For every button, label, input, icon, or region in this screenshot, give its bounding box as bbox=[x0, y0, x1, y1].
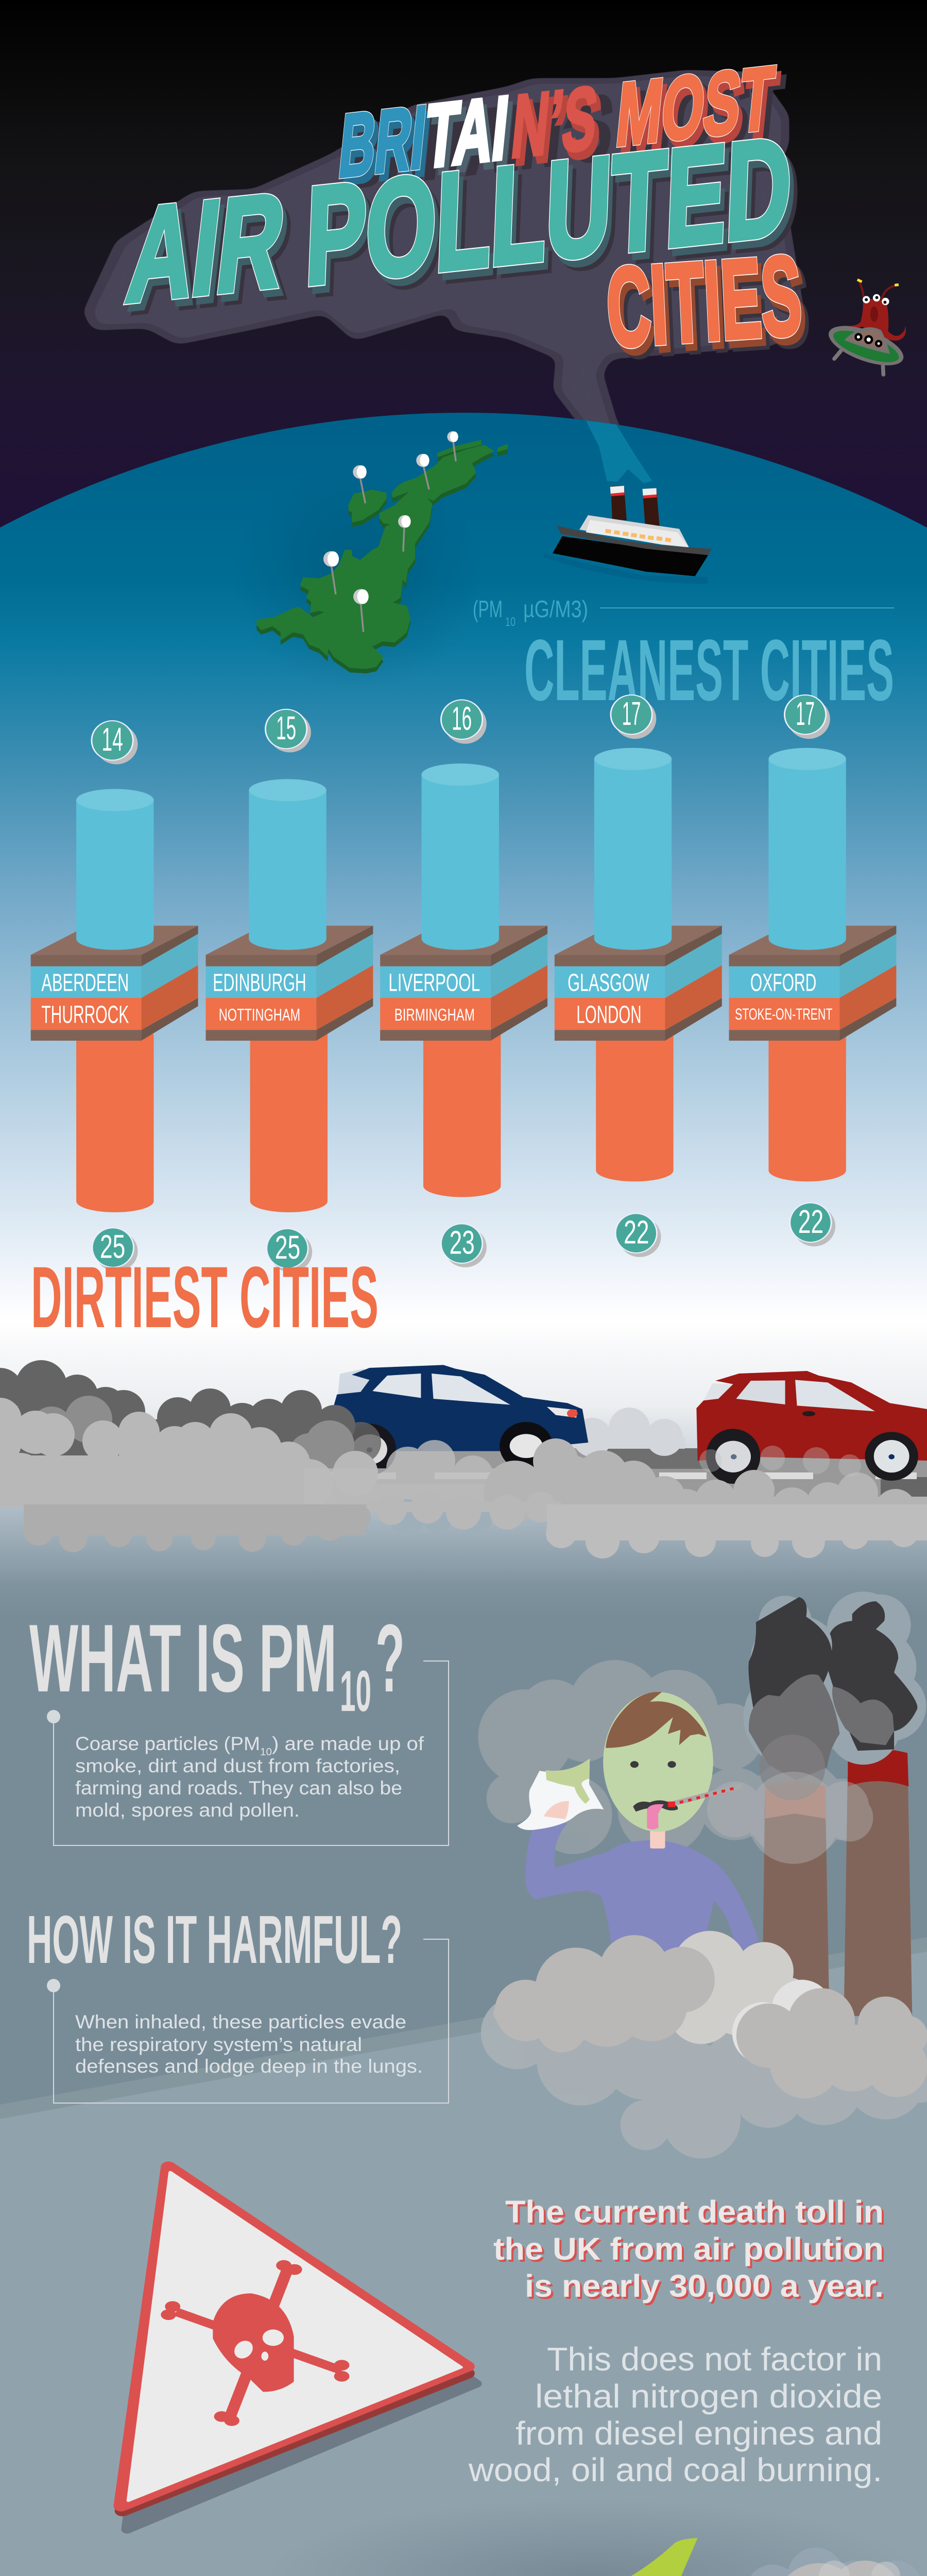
text box: how is it harmful bbox=[47, 1939, 449, 2103]
text box: how is it harmful: the respiratory system’s natural bbox=[75, 2034, 362, 2055]
text box: what is PM10: farming and roads. They can also be bbox=[75, 1777, 402, 1799]
text block: other pollutants: from diesel engines and bbox=[516, 2415, 882, 2452]
person eyes bbox=[630, 1761, 676, 1768]
ship smoke over sea bbox=[586, 420, 652, 483]
blue columns bbox=[76, 759, 846, 950]
label block 3 bbox=[380, 926, 547, 1041]
value numbers: 15 bbox=[276, 709, 296, 747]
chart: cleanest and dirtiest city columns bbox=[31, 695, 896, 1272]
text box: how is it harmful: defenses and lodge deep in the lungs. bbox=[75, 2056, 423, 2077]
text block: other pollutants: wood, oil and coal burning. bbox=[468, 2451, 882, 2488]
cloud behind plane tail bbox=[505, 2548, 922, 2576]
city names: LIVERPOOL bbox=[388, 968, 480, 996]
icon: alien on flying saucer bbox=[824, 280, 908, 375]
skull eyes bbox=[232, 2329, 284, 2361]
road bbox=[0, 1448, 927, 1505]
title white outline layer: AIR bbox=[121, 165, 291, 330]
title extrusion layer: AIR bbox=[125, 172, 296, 337]
text box: what is PM10: mold, spores and pollen. bbox=[75, 1800, 300, 1821]
callout: death toll: the UK from air pollution bbox=[495, 2233, 886, 2268]
value numbers: 25 bbox=[100, 1228, 125, 1265]
callout: death toll: The current death toll in bbox=[505, 2194, 884, 2229]
title extrusion layer: MOST bbox=[616, 55, 782, 172]
title shadow layer: CITIES bbox=[612, 242, 812, 381]
heading: what is PM10: WHAT IS PM bbox=[29, 1604, 337, 1712]
grey chimney smoke bbox=[749, 1674, 894, 1801]
cloud highlights bbox=[520, 2561, 900, 2576]
callout: death toll: is nearly 30,000 a year. bbox=[527, 2270, 886, 2306]
title extrusion layer: CITIES bbox=[608, 239, 808, 377]
mid grey exhaust smoke bbox=[31, 1396, 354, 1472]
title front layer: BRI bbox=[335, 87, 431, 197]
warning sign bbox=[121, 2167, 476, 2530]
aeroplane bbox=[285, 2538, 698, 2576]
title front layer: CITIES bbox=[604, 232, 804, 370]
city names: EDINBURGH bbox=[213, 968, 306, 996]
title extrusion layer: TAI bbox=[425, 84, 517, 194]
skull and crossbones bbox=[161, 2260, 349, 2426]
city names: GLASGOW bbox=[568, 968, 649, 996]
label block 5 bbox=[729, 926, 896, 1041]
city names: BIRMINGHAM bbox=[394, 1005, 475, 1024]
road-level smoke band bbox=[484, 1438, 927, 1530]
foreground cloud back bbox=[481, 1996, 927, 2159]
units label: (PM bbox=[473, 596, 503, 622]
callout: death toll: is nearly 30,000 a year. bbox=[525, 2268, 884, 2303]
background: cloud shadow on sky bbox=[314, 2473, 922, 2576]
person mouth bbox=[633, 1800, 678, 1811]
low smoke cloud right bbox=[546, 1504, 927, 1558]
city names: ABERDEEN bbox=[41, 968, 129, 996]
title front layer: TAI bbox=[421, 78, 513, 187]
chimney right bbox=[844, 1748, 912, 2016]
mid low cloud shadow bbox=[389, 1499, 492, 1535]
map extrusion bbox=[256, 444, 508, 673]
label block 2 bbox=[206, 926, 373, 1041]
map: United Kingdom with pins bbox=[232, 431, 508, 691]
title extrusion layer bbox=[125, 55, 808, 377]
heading: how is it harmful: HOW IS IT HARMFUL? bbox=[27, 1902, 402, 1977]
title white outline layer bbox=[121, 48, 804, 370]
background: earth and fading sky bbox=[0, 413, 927, 1618]
translucent smoke on red car bbox=[699, 1446, 861, 1477]
text block: other pollutants: This does not factor in bbox=[547, 2341, 882, 2378]
callout: death toll bbox=[493, 2194, 886, 2306]
smoke haze behind person bbox=[478, 1660, 872, 1860]
text box: what is PM10: 10 bbox=[260, 1747, 272, 1758]
light exhaust smoke cloud bbox=[0, 1398, 378, 1509]
text: ? bbox=[375, 1604, 405, 1712]
smoke halo bbox=[743, 1591, 926, 1768]
dark exhaust smoke bbox=[0, 1360, 381, 1463]
text box: what is PM10: Coarse particles (PM bbox=[75, 1733, 260, 1754]
text box: what is PM10 bbox=[47, 1661, 449, 1845]
units label bbox=[473, 596, 588, 629]
city names: LONDON bbox=[576, 1000, 642, 1028]
title shadow layer: BRITAIN’S MOST bbox=[342, 58, 787, 207]
title white outline layer: BRI bbox=[335, 87, 431, 197]
smoke plume behind title bbox=[85, 72, 804, 484]
chimney left bbox=[762, 1781, 829, 1994]
label block 4 bbox=[555, 926, 722, 1041]
city names: NOTTINGHAM bbox=[219, 1005, 300, 1024]
text box: what is PM10: smoke, dirt and dust from factories, bbox=[75, 1755, 400, 1776]
background: night sky bbox=[0, 0, 927, 567]
text: DIRTIEST CITIES bbox=[31, 1248, 379, 1346]
person tongue bbox=[647, 1804, 664, 1829]
thermometer bbox=[668, 1786, 742, 1807]
title white outline layer: POLLUTED bbox=[303, 109, 794, 314]
smoke passing chimneys bbox=[707, 1772, 873, 1864]
mid low cloud bbox=[366, 1490, 561, 1530]
car: red bbox=[696, 1371, 927, 1484]
column tops bbox=[76, 748, 846, 811]
icon: steam ship bbox=[544, 486, 712, 584]
title front layer: POLLUTED bbox=[303, 109, 794, 314]
car: blue bbox=[334, 1365, 588, 1475]
chart: cleanest and dirtiest city columns: 22 bbox=[798, 1203, 823, 1240]
callout: death toll: The current death toll in bbox=[507, 2196, 886, 2231]
background: diagonal light bands bbox=[0, 1937, 927, 2576]
foreground cloud highlight bbox=[732, 1980, 833, 2063]
map land bbox=[256, 440, 508, 669]
foreground cloud light bbox=[668, 1931, 819, 2044]
orange columns bbox=[76, 1034, 846, 1212]
value numbers: 23 bbox=[449, 1224, 475, 1261]
low smoke cloud left bbox=[23, 1504, 371, 1552]
value badges side bbox=[95, 699, 835, 1272]
units label: µG/M3) bbox=[523, 596, 588, 622]
person head bbox=[603, 1692, 713, 1832]
title front layer: AIR bbox=[121, 165, 291, 330]
title white outline layer: TAI bbox=[421, 78, 513, 187]
title front layer: MOST bbox=[612, 48, 778, 165]
background: slate section bbox=[0, 1616, 927, 2576]
tissue bbox=[517, 1758, 604, 1830]
title shadow layer: POLLUTED bbox=[311, 119, 802, 325]
value numbers: 17 bbox=[796, 695, 815, 732]
person hair bbox=[606, 1692, 707, 1748]
text block: other pollutants: lethal nitrogen dioxide bbox=[535, 2378, 882, 2415]
city names bbox=[41, 968, 832, 1028]
person neck bbox=[650, 1827, 665, 1849]
value numbers: 14 bbox=[101, 721, 123, 758]
title white outline layer: MOST bbox=[612, 48, 778, 165]
pale smoke between cars bbox=[573, 1408, 685, 1457]
value numbers bbox=[100, 695, 823, 1266]
title white outline layer: CITIES bbox=[604, 232, 804, 370]
text block: other pollutants bbox=[468, 2341, 882, 2488]
illustration: sick person and chimneys bbox=[478, 1591, 927, 2159]
title extrusion layer: N’S bbox=[511, 74, 606, 184]
value badges face bbox=[92, 695, 831, 1268]
city names: THURROCK bbox=[41, 1000, 129, 1028]
city names: OXFORD bbox=[750, 968, 816, 996]
callout: death toll: the UK from air pollution bbox=[493, 2231, 884, 2266]
label block 1 bbox=[31, 926, 198, 1041]
value numbers: 22 bbox=[624, 1214, 649, 1250]
foreground cloud solid bbox=[493, 1935, 927, 2098]
title front layer: N’S bbox=[507, 67, 602, 177]
text box: what is PM10: ) are made up of bbox=[272, 1733, 424, 1754]
value numbers: 25 bbox=[275, 1229, 300, 1266]
value numbers: 16 bbox=[452, 700, 472, 737]
title extrusion layer: POLLUTED bbox=[307, 115, 798, 321]
map pins bbox=[323, 431, 458, 631]
title shadow layer: AIR bbox=[129, 175, 299, 341]
heading: what is PM10 bbox=[29, 1604, 405, 1723]
title bbox=[121, 48, 812, 381]
units rule bbox=[600, 607, 894, 608]
title shadow layer bbox=[129, 58, 812, 381]
smoke cloud over plane bbox=[461, 2561, 927, 2576]
title front layer bbox=[121, 48, 804, 370]
translucent smoke over middle road bbox=[304, 1440, 500, 1507]
value numbers: 17 bbox=[622, 695, 641, 732]
person body bbox=[525, 1818, 759, 1955]
text box: how is it harmful: When inhaled, these particles evade bbox=[75, 2011, 406, 2032]
dark chimney smoke bbox=[748, 1597, 917, 1765]
title extrusion layer: BRI bbox=[339, 94, 435, 204]
units label: 10 bbox=[505, 615, 516, 629]
background: shadow above sky edge bbox=[366, 2523, 797, 2576]
heading: what is PM10: 10 bbox=[340, 1659, 371, 1723]
